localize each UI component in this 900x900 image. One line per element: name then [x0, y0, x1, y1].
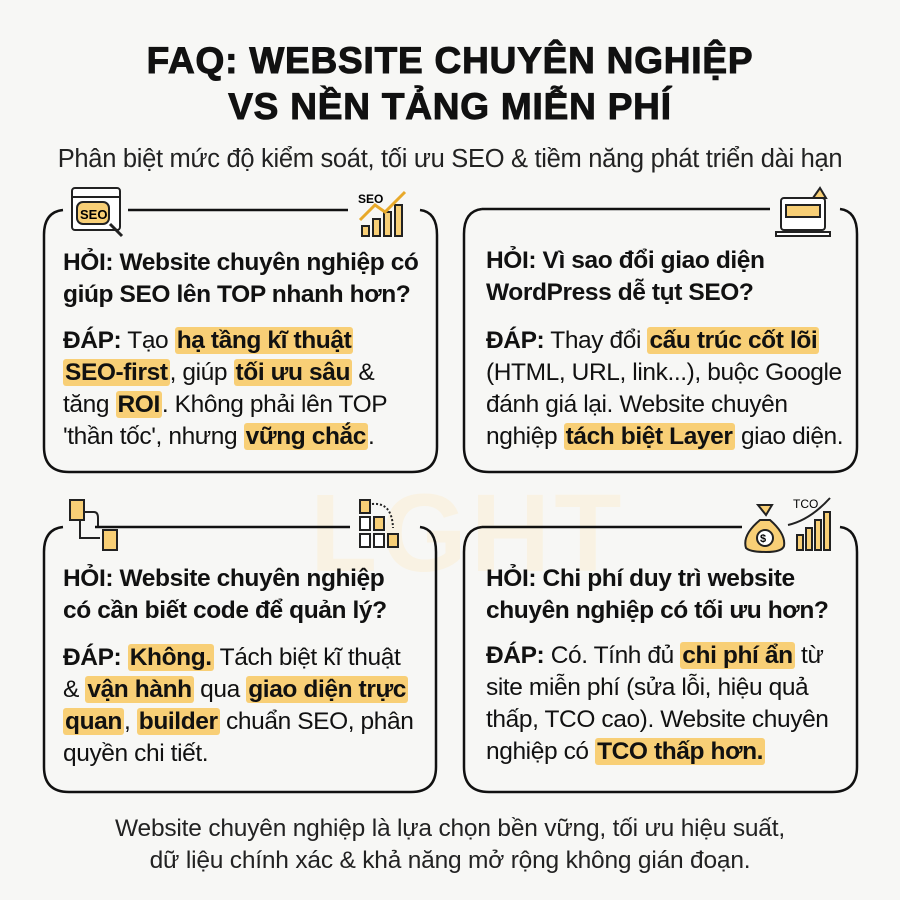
- panel: bottom-right question: HỎI: Chi phí duy trì website: [486, 565, 795, 592]
- subtitle: Phân biệt mức độ kiểm soát, tối ưu SEO & tiềm năng phát triển dài hạn: [58, 145, 842, 173]
- panel: bottom-right answer: ĐÁP: Có. Tính đủ chi phí ẩn từ: [486, 642, 823, 669]
- panel: top-left question: [63, 248, 418, 308]
- panel: bottom-left question: có cần biết code để quản lý?: [63, 597, 387, 624]
- icon: broken laptop: [776, 188, 830, 236]
- panel: bottom-right answer: site miễn phí (sửa lỗi, hiệu quả: [486, 674, 808, 701]
- panel: top-left answer: 'thần tốc', nhưng vững chắc.: [63, 423, 374, 450]
- panel: top-left answer: SEO-first, giúp tối ưu sâu &: [65, 359, 374, 386]
- icon: seo browser: $: [760, 533, 766, 545]
- panel: top-right answer: (HTML, URL, link...), buộc Google: [486, 359, 842, 386]
- panel: top-right answer: nghiệp tách biệt Layer giao diện.: [486, 423, 843, 450]
- panel: bottom-left answer: [63, 644, 413, 767]
- icon: seo browser: TCO: [793, 497, 818, 511]
- panel: top-left answer: [63, 326, 387, 450]
- title: FAQ: WEBSITE CHUYÊN NGHIỆP: [147, 40, 753, 81]
- panel: top-right answer: [486, 326, 843, 450]
- panel: bottom-right answer: nghiệp có TCO thấp hơn.: [486, 738, 763, 765]
- panel: top-right answer: đánh giá lại. Website chuyên: [486, 391, 788, 418]
- icon: money bag tco: [745, 498, 830, 552]
- panel: bottom-right question: chuyên nghiệp có tối ưu hơn?: [486, 597, 828, 624]
- panel: bottom-right answer: thấp, TCO cao). Website chuyên: [486, 706, 829, 733]
- panel: bottom-left question: [63, 564, 387, 624]
- icon: seo browser: SEO: [80, 207, 107, 222]
- panel: top-right question: HỎI: Vì sao đổi giao diện: [486, 247, 765, 274]
- panel: bottom-left answer: ĐÁP: Không. Tách biệt kĩ thuật: [63, 644, 400, 671]
- icon: seo growth: [360, 192, 405, 236]
- title: VS NỀN TẢNG MIỄN PHÍ: [228, 86, 672, 127]
- panel: top-left answer: ĐÁP: Tạo hạ tầng kĩ thuật: [63, 327, 351, 354]
- title: [147, 39, 753, 127]
- panel: bottom-left question: HỎI: Website chuyên nghiệp: [63, 565, 384, 592]
- watermark: LGHT: [310, 472, 625, 595]
- panel: top-left answer: tăng ROI. Không phải lên TOP: [63, 391, 387, 418]
- icon: flow boxes: [70, 500, 117, 550]
- panel: bottom-left answer: & vận hành qua giao diện trực: [63, 676, 406, 703]
- panel: bottom-right question: [486, 564, 828, 624]
- icon: seo browser: SEO: [358, 192, 383, 206]
- icon: grid boxes: [360, 500, 398, 547]
- panel: top-right question: [486, 246, 765, 306]
- panel: top-right answer: ĐÁP: Thay đổi cấu trúc cốt lõi: [486, 327, 817, 354]
- panel: bottom-right answer: [486, 642, 829, 765]
- footer: dữ liệu chính xác & khả năng mở rộng không gián đoạn.: [150, 847, 750, 874]
- panel: top-left question: HỎI: Website chuyên nghiệp có: [63, 249, 418, 276]
- footer: Website chuyên nghiệp là lựa chọn bền vững, tối ưu hiệu suất,: [115, 815, 785, 842]
- panel: bottom-left answer: quan, builder chuẩn SEO, phân: [65, 708, 413, 735]
- footer: [115, 815, 785, 874]
- panel: top-right question: WordPress dễ tụt SEO?: [486, 279, 754, 306]
- panel: bottom-left answer: quyền chi tiết.: [63, 740, 208, 767]
- panel: top-left question: giúp SEO lên TOP nhanh hơn?: [63, 281, 410, 308]
